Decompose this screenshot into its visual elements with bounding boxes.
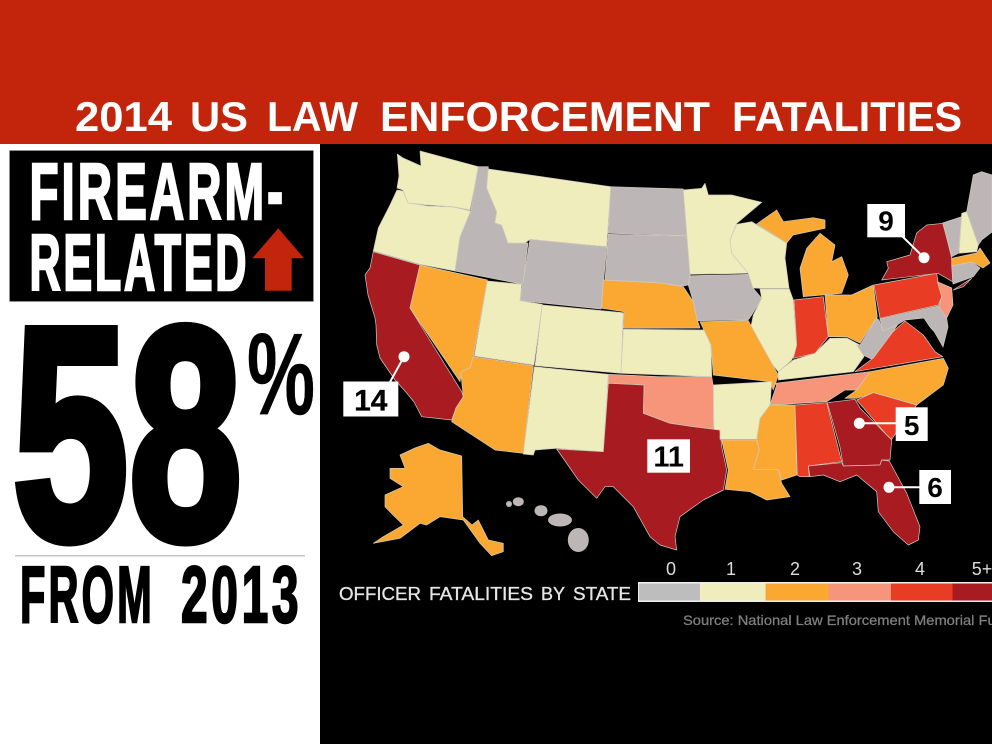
state: Long Island New York bbox=[953, 278, 972, 290]
state: Nebraska bbox=[602, 280, 700, 328]
legend title: BY bbox=[541, 584, 565, 604]
state: Maine bbox=[967, 172, 992, 245]
state: Washington bbox=[397, 151, 478, 210]
firearm-related headline box bbox=[10, 146, 314, 307]
legend numbers: 5+ bbox=[972, 559, 992, 579]
state: California bbox=[365, 252, 463, 420]
legend numbers: 0 bbox=[666, 559, 676, 579]
title: ENFORCEMENT bbox=[380, 93, 710, 140]
state: Texas bbox=[557, 383, 727, 550]
state: Vermont bbox=[943, 217, 962, 257]
state: Florida bbox=[808, 460, 920, 545]
callout: Georgia 5 bbox=[854, 407, 928, 441]
state: Idaho bbox=[455, 167, 528, 284]
state: Alabama bbox=[795, 403, 842, 477]
callout: New York 9 bbox=[867, 204, 930, 263]
US choropleth map bbox=[365, 151, 992, 556]
title: US bbox=[190, 93, 248, 140]
callout: Florida 6: 6 bbox=[927, 472, 943, 503]
state: Mississippi bbox=[753, 405, 797, 480]
title: LAW bbox=[267, 93, 358, 140]
callout: Georgia 5: 5 bbox=[904, 410, 919, 441]
from 2013 text: FROM bbox=[20, 549, 155, 640]
legend numbers: 1 bbox=[726, 559, 736, 579]
big statistic 58 percent: % bbox=[247, 309, 315, 439]
legend numbers: 3 bbox=[852, 559, 862, 579]
state: Maryland and Delaware bbox=[880, 306, 948, 347]
state: North Dakota bbox=[608, 187, 687, 236]
callout: New York 9: 9 bbox=[878, 206, 894, 236]
title bbox=[75, 93, 962, 140]
state: Oregon bbox=[373, 190, 471, 271]
legend numbers: 2 bbox=[790, 559, 800, 579]
state: Iowa bbox=[688, 274, 762, 321]
state: Pennsylvania bbox=[874, 273, 942, 318]
state: Illinois bbox=[749, 289, 797, 372]
left white panel bbox=[0, 144, 320, 744]
state: Indiana bbox=[793, 297, 828, 358]
callout: Florida 6 bbox=[884, 470, 951, 504]
state: New Mexico bbox=[523, 367, 608, 455]
state: Hawaii bbox=[506, 497, 589, 552]
state: North Carolina bbox=[845, 358, 948, 405]
callout: Texas 11 bbox=[647, 439, 690, 474]
state: Oklahoma bbox=[608, 374, 713, 430]
state: Arizona bbox=[452, 357, 533, 453]
state: Louisiana bbox=[722, 440, 790, 500]
state: New Jersey bbox=[937, 282, 953, 318]
headline line one: FIREARM- bbox=[30, 146, 286, 236]
title: 2014 bbox=[75, 93, 173, 140]
legend title bbox=[339, 584, 631, 604]
divider rule bbox=[15, 555, 305, 556]
state: Wisconsin bbox=[730, 222, 789, 288]
state: Ohio bbox=[825, 285, 877, 343]
state: Colorado bbox=[535, 305, 623, 373]
state: Michigan lower peninsula bbox=[800, 233, 848, 297]
state: Montana bbox=[487, 169, 611, 247]
from 2013 text: 2013 bbox=[181, 549, 302, 639]
legend numbers: 4 bbox=[915, 559, 925, 579]
legend colour scale bbox=[638, 582, 992, 602]
state: New Hampshire bbox=[959, 212, 978, 253]
callout: California 14 bbox=[343, 351, 410, 418]
source note: Source: National Law Enforcement Memorial Fund bbox=[683, 612, 992, 628]
legend title: STATE bbox=[573, 584, 631, 604]
legend title: OFFICER bbox=[339, 584, 421, 604]
state: West Virginia bbox=[857, 318, 902, 360]
state: Utah bbox=[474, 281, 542, 365]
Chesapeake Bay bbox=[930, 328, 938, 345]
legend numbers bbox=[666, 559, 992, 579]
state: Kentucky bbox=[778, 338, 864, 380]
callout: California 14: 14 bbox=[354, 385, 388, 418]
state: South Dakota bbox=[605, 234, 690, 286]
state: Wyoming bbox=[520, 239, 607, 309]
state: Arkansas bbox=[713, 382, 772, 439]
icon: red up arrow bbox=[252, 228, 304, 291]
legend title: FATALITIES bbox=[429, 584, 533, 604]
state: Minnesota bbox=[683, 183, 762, 274]
big statistic 58 percent: 8 bbox=[129, 266, 242, 604]
state: Georgia bbox=[827, 399, 892, 466]
big statistic 58 percent: 5 bbox=[12, 266, 128, 604]
from 2013 text bbox=[20, 549, 302, 640]
headline line two: RELATED bbox=[30, 218, 249, 307]
state: Nevada bbox=[410, 265, 487, 382]
top red banner bbox=[0, 0, 992, 144]
state: Alaska bbox=[373, 443, 503, 556]
callout: Texas 11: 11 bbox=[653, 442, 684, 474]
state: Tennessee bbox=[770, 372, 870, 405]
state: Virginia bbox=[855, 321, 943, 372]
state: South Carolina bbox=[857, 393, 917, 439]
state: Connecticut and Rhode Island bbox=[952, 262, 980, 284]
state: Michigan upper peninsula bbox=[757, 210, 825, 243]
state: New York bbox=[882, 223, 953, 282]
state: Missouri bbox=[700, 321, 778, 390]
title: FATALITIES bbox=[732, 93, 962, 140]
state: Kansas bbox=[621, 329, 712, 377]
state: Massachusetts bbox=[952, 248, 990, 268]
big statistic 58 percent bbox=[12, 266, 315, 604]
